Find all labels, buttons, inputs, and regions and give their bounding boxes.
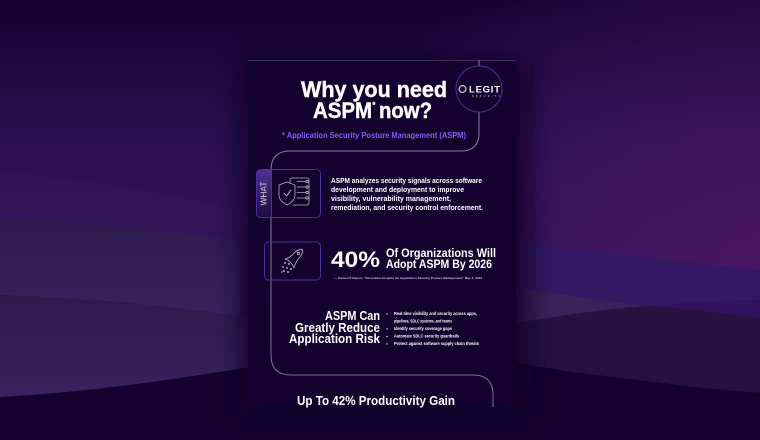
icon: rocket — [281, 249, 303, 273]
stat: 40 percent — [331, 247, 496, 272]
what description: ASPM analyzes security signals across software — [331, 176, 482, 185]
risk heading — [289, 309, 380, 346]
what label: WHAT — [258, 182, 268, 206]
risk heading: Greatly Reduce — [295, 321, 380, 335]
what card — [256, 160, 320, 225]
document drop shadow — [240, 60, 530, 410]
benefits list: pipelines, SDLC systems, and teams — [394, 318, 452, 324]
subtitle: * Application Security Posture Management (ASPM) — [282, 130, 466, 140]
stat: 40 percent: Adopt ASPM By 2026 — [386, 259, 492, 271]
what description: development and deployment to improve — [331, 185, 464, 194]
logo badge: LEGIT — [469, 84, 500, 96]
title — [301, 77, 447, 123]
what description — [331, 176, 483, 212]
risk heading: Application Risk — [289, 332, 380, 346]
stat: 40 percent: Of Organizations Will — [386, 248, 496, 260]
rocket card — [264, 242, 320, 280]
risk heading: ASPM Can — [325, 309, 380, 323]
benefits list: Real-time visibility and security across apps, — [394, 311, 477, 316]
logo badge: SECURITY — [472, 95, 500, 98]
title: * — [372, 102, 376, 109]
footnote: — Gartner® Report, “Innovation Insights for Application Security Posture Management” May 4, 2023 — [334, 276, 482, 280]
title: now? — [379, 98, 432, 123]
benefits list — [386, 311, 479, 346]
background: gradient sky — [0, 0, 760, 300]
title: Why you need — [301, 77, 447, 102]
benefits list: Identify security coverage gaps — [394, 326, 452, 331]
logo badge — [456, 66, 502, 112]
what description: visibility, vulnerability management, — [331, 194, 451, 203]
benefits list: Automate SDLC security guardrails — [394, 334, 459, 338]
document panel — [248, 60, 516, 408]
title: ASPM — [313, 98, 372, 123]
connector path — [271, 60, 493, 407]
background: layered hills — [0, 173, 760, 440]
productivity heading: Up To 42% Productivity Gain — [297, 394, 455, 408]
icon: shield and checklist — [279, 178, 309, 205]
benefits list: Protect against software supply chain threats — [394, 341, 479, 346]
stat: 40 percent: 40% — [331, 247, 380, 272]
what description: remediation, and security control enforcement. — [331, 203, 483, 212]
